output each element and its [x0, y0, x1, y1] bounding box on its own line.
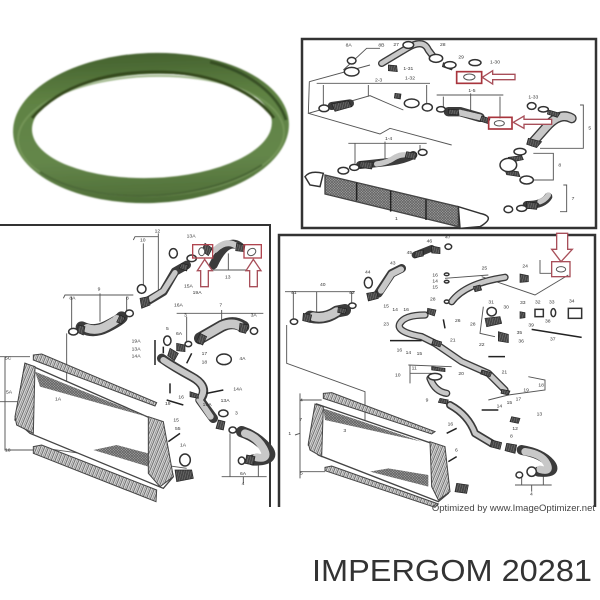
exploded hose diagram: 45 — [407, 250, 412, 256]
exploded hose diagram: 5C — [5, 355, 12, 361]
exploded hose diagram: 1-5 — [468, 88, 476, 94]
exploded hose diagram: 10 — [140, 238, 146, 244]
exploded hose diagram: 8A — [346, 43, 352, 49]
exploded hose diagram: 38 — [545, 319, 551, 325]
exploded hose diagram: 9 — [98, 287, 101, 293]
exploded hose diagram: 1-4 — [385, 136, 392, 142]
exploded hose diagram: 19 — [165, 401, 171, 407]
exploded hose diagram — [0, 229, 270, 502]
exploded hose diagram: 33 — [520, 300, 526, 306]
exploded hose diagram: 16 — [403, 307, 409, 313]
exploded hose diagram: 12 — [155, 229, 160, 235]
exploded hose diagram: 8 — [126, 295, 129, 301]
exploded hose diagram: 34 — [569, 299, 575, 305]
exploded hose diagram: 46 — [427, 239, 432, 245]
exploded hose diagram: 1A — [180, 443, 187, 449]
exploded hose diagram: 41 — [291, 290, 297, 296]
exploded hose diagram: 32 — [535, 299, 541, 305]
exploded hose diagram: 5 — [166, 326, 169, 332]
exploded hose diagram: 42 — [349, 290, 355, 296]
exploded hose diagram: 14 — [497, 403, 502, 409]
exploded hose diagram: 15 — [432, 285, 438, 291]
exploded hose diagram: 55 — [175, 426, 181, 432]
exploded hose diagram: 1-31 — [403, 66, 414, 72]
exploded hose diagram: 4 — [242, 481, 245, 487]
title: part number: IMPERGOM 20281 — [312, 554, 592, 588]
exploded hose diagram: 36 — [518, 339, 524, 345]
exploded hose diagram: 15 — [417, 351, 422, 357]
exploded hose diagram: 23 — [383, 322, 389, 328]
panel frame — [279, 235, 595, 507]
exploded hose diagram: 43 — [390, 260, 396, 266]
panel frame — [302, 39, 596, 228]
exploded hose diagram: 1 — [395, 216, 398, 222]
exploded hose diagram: 3 — [184, 313, 187, 319]
red callout — [552, 262, 570, 277]
exploded hose diagram: 1-30 — [490, 59, 500, 65]
exploded hose diagram: 40 — [320, 282, 326, 288]
exploded hose diagram: 4 — [530, 492, 533, 498]
exploded hose diagram: 21 — [502, 369, 507, 375]
exploded hose diagram: 24 — [522, 263, 528, 269]
exploded hose diagram: 11 — [412, 365, 417, 371]
exploded hose diagram: 16 — [397, 348, 402, 354]
exploded hose diagram: 13 — [537, 411, 542, 417]
exploded hose diagram: 1 — [288, 431, 291, 437]
exploded hose diagram: 22 — [479, 342, 485, 348]
exploded hose diagram: 18 — [202, 359, 207, 365]
exploded hose diagram: 8A — [69, 295, 76, 301]
exploded hose diagram: 5 — [588, 125, 591, 131]
exploded hose diagram: 14A — [233, 387, 243, 393]
exploded hose diagram: 37 — [550, 337, 556, 343]
exploded hose diagram: 39 — [528, 323, 534, 329]
watermark: Optimized by www.ImageOptimizer.net — [432, 503, 595, 514]
exploded hose diagram: 3 — [343, 428, 346, 434]
exploded hose diagram: 1A — [55, 397, 62, 403]
exploded hose diagram: 16 — [178, 394, 184, 400]
exploded hose diagram: 13 — [225, 274, 231, 280]
exploded hose diagram: 28 — [430, 297, 436, 303]
exploded hose diagram: 21 — [450, 338, 456, 344]
exploded hose diagram: 19A — [203, 402, 212, 408]
exploded hose diagram: 5 — [300, 470, 303, 476]
red callouts — [193, 245, 213, 258]
exploded hose diagram: 18 — [5, 448, 11, 454]
exploded hose diagram: 7 — [572, 196, 575, 202]
exploded hose diagram: 47 — [445, 234, 451, 240]
exploded hose diagram: 4 — [300, 398, 303, 404]
exploded hose diagram: 8B — [378, 43, 385, 49]
exploded hose diagram: 16A — [174, 303, 184, 309]
exploded hose diagram: 16 — [432, 273, 438, 279]
exploded hose diagram: 19A — [193, 290, 202, 296]
exploded hose diagram: 17 — [516, 397, 521, 403]
exploded hose diagram: 26 — [455, 318, 461, 324]
exploded hose diagram: 14 — [392, 307, 398, 313]
exploded hose diagram: 3 — [235, 411, 238, 417]
exploded hose diagram: 14 — [432, 279, 438, 285]
exploded hose diagram: 9 — [426, 398, 429, 404]
exploded hose diagram: 33 — [549, 299, 555, 305]
exploded hose diagram: 28 — [470, 322, 476, 328]
panel: top right diagram — [302, 39, 596, 228]
exploded hose diagram: 44 — [365, 269, 371, 275]
exploded hose diagram: 8 — [510, 433, 513, 439]
intercooler — [323, 393, 435, 434]
exploded hose diagram: 31 — [488, 299, 494, 305]
exploded hose diagram: 10 — [395, 373, 401, 379]
exploded hose diagram: 15A — [184, 283, 194, 289]
exploded hose diagram: 28 — [440, 42, 446, 48]
product photo: green rubber sealing ring — [10, 48, 292, 208]
exploded hose diagram — [285, 233, 582, 507]
exploded hose diagram — [305, 42, 591, 228]
exploded hose diagram: 29 — [458, 54, 464, 60]
intercooler — [325, 175, 458, 227]
exploded hose diagram: 6 — [455, 448, 458, 454]
exploded hose diagram: 17 — [202, 351, 207, 357]
exploded hose diagram: 15 — [507, 400, 512, 406]
exploded hose diagram: 7 — [219, 303, 222, 309]
exploded hose diagram: 19 — [523, 388, 529, 394]
panel: bottom left diagram — [0, 225, 270, 507]
exploded hose diagram: 15 — [383, 303, 389, 309]
exploded hose diagram: 2-3 — [375, 78, 382, 84]
exploded hose diagram: 19A — [132, 339, 141, 345]
exploded hose diagram: 7 — [299, 417, 302, 423]
panel: bottom right diagram — [279, 233, 595, 507]
exploded hose diagram: 6A — [176, 331, 183, 337]
panel frame — [0, 225, 270, 507]
exploded hose diagram: 13A — [221, 398, 230, 404]
exploded hose diagram: 18 — [538, 383, 544, 389]
exploded hose diagram: 16 — [448, 421, 453, 427]
exploded hose diagram: 12 — [512, 426, 518, 432]
exploded hose diagram: 30 — [503, 304, 509, 310]
exploded hose diagram: 14 — [406, 350, 411, 356]
exploded hose diagram: 1-33 — [528, 94, 539, 100]
exploded hose diagram: 4A — [239, 356, 246, 362]
exploded hose diagram: 35 — [517, 330, 522, 336]
exploded hose diagram: 27 — [393, 42, 399, 48]
red callouts — [457, 72, 482, 83]
exploded hose diagram: 13A — [132, 347, 141, 353]
exploded hose diagram: 6A — [240, 471, 247, 477]
exploded hose diagram: 14A — [132, 353, 141, 359]
exploded hose diagram: 15 — [173, 417, 179, 423]
exploded hose diagram: 5A — [6, 389, 13, 395]
exploded hose diagram: 3A — [251, 313, 257, 319]
exploded hose diagram: 1-32 — [405, 75, 415, 81]
exploded hose diagram: 8 — [558, 163, 561, 169]
exploded hose diagram: 13A — [187, 233, 196, 239]
intercooler — [33, 354, 157, 406]
exploded hose diagram: 25 — [482, 265, 487, 271]
exploded hose diagram: 20 — [458, 371, 464, 377]
